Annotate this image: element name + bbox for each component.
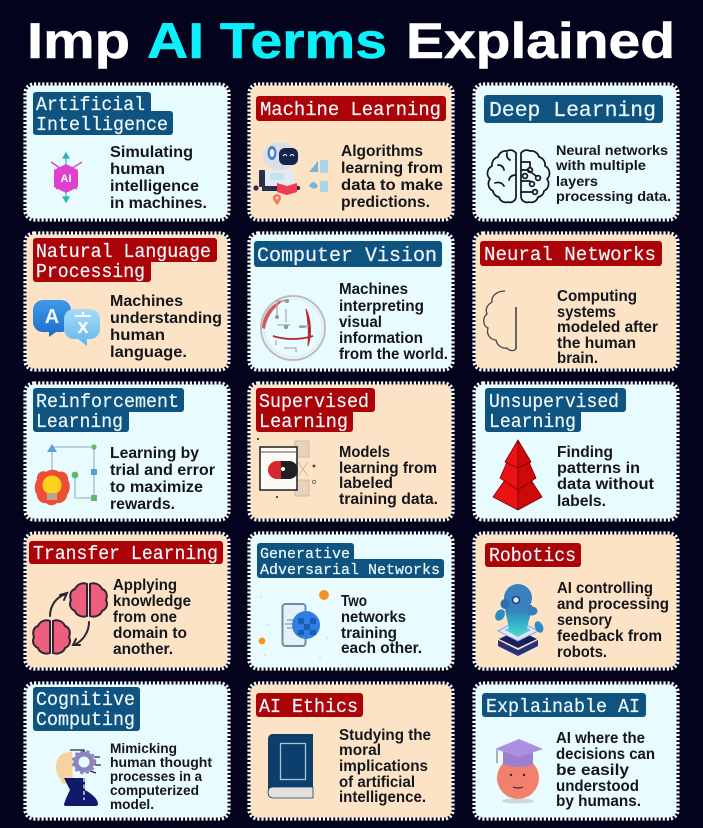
icon: translation bubbles: A: [45, 306, 59, 328]
heading: Computer Vision: Computer Vision: [257, 245, 437, 268]
description: Reinforcement Learning: trial and error: [110, 462, 215, 479]
description: Machine Learning: learning from: [341, 160, 443, 177]
description: Unsupervised Learning: labels.: [557, 493, 606, 510]
description: Artificial Intelligence: human: [110, 161, 165, 178]
panel: Generative Adversarial Networks: [249, 533, 453, 669]
description: Deep Learning: with multiple: [555, 157, 646, 173]
description: Generative Adversarial Networks: Two: [341, 593, 367, 610]
icon: translation bubbles: x: [77, 316, 89, 338]
panel: Unsupervised Learning: [474, 383, 678, 520]
description: Natural Language Processing: human: [110, 327, 165, 344]
description: Robotics: and processing: [557, 596, 669, 613]
description: Supervised Learning: training data.: [339, 491, 438, 508]
description: Transfer Learning: knowledge: [113, 593, 191, 610]
description: Generative Adversarial Networks: training: [341, 625, 397, 642]
description: Computer Vision: interpreting: [339, 298, 424, 315]
title: AI Terms: [147, 13, 387, 69]
description: Neural Networks: Computing: [557, 288, 637, 305]
icon: AI chip: [51, 153, 82, 202]
heading: Artificial Intelligence: Intelligence: [36, 114, 168, 136]
description: Explainable AI: understood: [556, 778, 639, 795]
heading: Machine Learning: Machine Learning: [260, 99, 441, 121]
heading: Reinforcement Learning: Learning: [36, 411, 123, 433]
description: Unsupervised Learning: Finding: [557, 444, 613, 461]
panel: AI Ethics: [249, 683, 453, 819]
description: Explainable AI: be easily: [556, 762, 629, 779]
description: Cognitive Computing: computerized: [110, 782, 199, 798]
panel: Supervised Learning: [249, 383, 453, 520]
description: Natural Language Processing: [110, 293, 222, 361]
title: Explained: [406, 13, 675, 69]
description: Natural Language Processing: understanding: [110, 310, 222, 327]
description: AI Ethics: implications: [339, 758, 428, 775]
icon: AI chip: AI: [60, 173, 72, 185]
icon: brain circuit: [488, 150, 549, 202]
panel: Reinforcement Learning: [25, 383, 229, 520]
description: Transfer Learning: Applying: [113, 577, 177, 594]
heading: Unsupervised Learning: Learning: [489, 411, 576, 433]
description: Artificial Intelligence: Simulating: [110, 144, 193, 161]
heading: Reinforcement Learning: Reinforcement: [36, 391, 179, 413]
heading: Cognitive Computing: [33, 687, 140, 731]
description: Robotics: robots.: [557, 644, 607, 661]
heading: Generative Adversarial Networks: Adversarial Networks: [260, 562, 440, 579]
description: Natural Language Processing: Machines: [110, 293, 183, 310]
icon: holographic robot: [493, 584, 545, 656]
description: Reinforcement Learning: [110, 445, 215, 513]
description: AI Ethics: moral: [339, 742, 381, 759]
icon: translation bubbles: [33, 300, 100, 346]
heading: Natural Language Processing: Natural Language: [36, 241, 211, 263]
description: Machine Learning: predictions.: [341, 194, 430, 211]
heading: Unsupervised Learning: Unsupervised: [489, 391, 619, 413]
description: Computer Vision: information: [339, 330, 423, 347]
heading: Deep Learning: Deep Learning: [489, 100, 656, 123]
description: Transfer Learning: [113, 577, 191, 658]
panel: Machine Learning: [249, 84, 453, 220]
panel: Natural Language Processing: [25, 233, 229, 370]
description: Explainable AI: AI where the: [556, 730, 645, 747]
heading: Artificial Intelligence: Artificial: [36, 94, 145, 116]
description: Reinforcement Learning: rewards.: [110, 496, 175, 513]
description: Robotics: [557, 580, 669, 661]
description: Generative Adversarial Networks: [341, 593, 422, 657]
panel: Artificial Intelligence: [25, 84, 229, 220]
description: Transfer Learning: another.: [113, 641, 173, 658]
description: Artificial Intelligence: in machines.: [110, 195, 207, 212]
description: Machine Learning: Algorithms: [341, 143, 423, 160]
heading: Generative Adversarial Networks: Generative: [260, 546, 350, 563]
description: Explainable AI: decisions can: [556, 746, 655, 763]
panel: Transfer Learning: [25, 533, 229, 669]
description: Deep Learning: layers: [556, 173, 598, 189]
description: Supervised Learning: learning from: [339, 460, 437, 477]
panel: Deep Learning: [474, 84, 678, 220]
icon: half brain outline: [484, 291, 516, 351]
description: Supervised Learning: Models: [339, 444, 390, 461]
description: Artificial Intelligence: [110, 144, 207, 212]
description: Robotics: AI controlling: [557, 580, 653, 597]
description: AI Ethics: intelligence.: [339, 789, 426, 806]
description: AI Ethics: of artificial: [339, 774, 415, 791]
heading: Explainable AI: Explainable AI: [486, 696, 640, 718]
title: [27, 13, 675, 69]
description: Explainable AI: by humans.: [556, 793, 641, 810]
description: Neural Networks: modeled after: [557, 319, 658, 336]
description: AI Ethics: [339, 727, 431, 806]
heading: Generative Adversarial Networks: [257, 543, 444, 579]
description: Robotics: feedback from: [557, 628, 662, 645]
description: Deep Learning: processing data.: [556, 188, 671, 204]
description: Deep Learning: [555, 142, 671, 204]
heading: Natural Language Processing: Processing: [36, 261, 145, 283]
description: Explainable AI: [556, 730, 655, 810]
heading: Cognitive Computing: Cognitive: [36, 689, 135, 711]
icon: book: [268, 734, 313, 798]
heading: Robotics: Robotics: [489, 545, 576, 567]
icon: red pyramid: [493, 440, 542, 510]
heading: Natural Language Processing: [33, 238, 217, 283]
description: Cognitive Computing: [110, 740, 212, 812]
panel: Robotics: [474, 533, 678, 669]
heading: Supervised Learning: Learning: [259, 411, 348, 433]
icon: robot reading: [253, 142, 328, 205]
description: Cognitive Computing: Mimicking: [110, 740, 177, 756]
description: Neural Networks: systems: [557, 304, 616, 321]
icon: head with gear: [56, 750, 101, 806]
heading: Unsupervised Learning: [485, 388, 626, 433]
heading: Cognitive Computing: Computing: [36, 709, 135, 731]
heading: Supervised Learning: [256, 388, 375, 433]
description: Generative Adversarial Networks: networks: [341, 609, 406, 626]
description: Computer Vision: Machines: [339, 281, 408, 298]
heading: Supervised Learning: Supervised: [259, 391, 369, 413]
description: Neural Networks: the human: [557, 335, 636, 352]
description: Neural Networks: [557, 288, 658, 367]
description: Deep Learning: Neural networks: [556, 142, 668, 158]
heading: Neural Networks: Neural Networks: [484, 244, 656, 266]
description: Machine Learning: data to make: [341, 177, 443, 194]
description: Machine Learning: [341, 143, 443, 211]
description: Computer Vision: visual: [339, 314, 382, 331]
title: Imp: [27, 13, 130, 69]
heading: Reinforcement Learning: [33, 388, 184, 433]
icon: reward path with brain bulb: [35, 444, 97, 505]
description: Artificial Intelligence: intelligence: [110, 178, 199, 195]
description: Cognitive Computing: human thought: [110, 754, 212, 770]
panel: Cognitive Computing: [25, 683, 229, 819]
description: Robotics: sensory: [557, 612, 612, 629]
icon: transferring brains: [33, 583, 107, 654]
description: Supervised Learning: labeled: [339, 475, 393, 492]
description: Cognitive Computing: model.: [110, 796, 154, 812]
description: Transfer Learning: from one: [113, 609, 177, 626]
heading: Transfer Learning: Transfer Learning: [33, 543, 218, 565]
panel: Neural Networks: [474, 233, 678, 370]
description: Reinforcement Learning: Learning by: [110, 445, 199, 462]
description: Computer Vision: [339, 281, 448, 363]
description: Computer Vision: from the world.: [339, 346, 448, 363]
heading: AI Ethics: AI Ethics: [259, 696, 358, 718]
panel: Explainable AI: [474, 683, 678, 819]
description: Cognitive Computing: processes in a: [110, 768, 202, 784]
description: Natural Language Processing: language.: [110, 344, 187, 361]
icon: face scan: [261, 296, 325, 360]
icon: graduate face: [495, 739, 543, 804]
panel: Computer Vision: [249, 233, 453, 370]
description: Transfer Learning: domain to: [113, 625, 187, 642]
description: Supervised Learning: [339, 444, 438, 508]
icon: labeled image window: [257, 438, 316, 498]
description: Reinforcement Learning: to maximize: [110, 479, 203, 496]
description: Generative Adversarial Networks: each other.: [341, 640, 422, 657]
description: Neural Networks: brain.: [557, 350, 598, 367]
heading: Artificial Intelligence: [33, 92, 173, 136]
description: Unsupervised Learning: patterns in: [557, 460, 640, 477]
icon: phone and globe: [259, 590, 329, 658]
description: Unsupervised Learning: [557, 444, 655, 510]
description: Unsupervised Learning: data without: [557, 476, 655, 493]
description: AI Ethics: Studying the: [339, 727, 431, 744]
